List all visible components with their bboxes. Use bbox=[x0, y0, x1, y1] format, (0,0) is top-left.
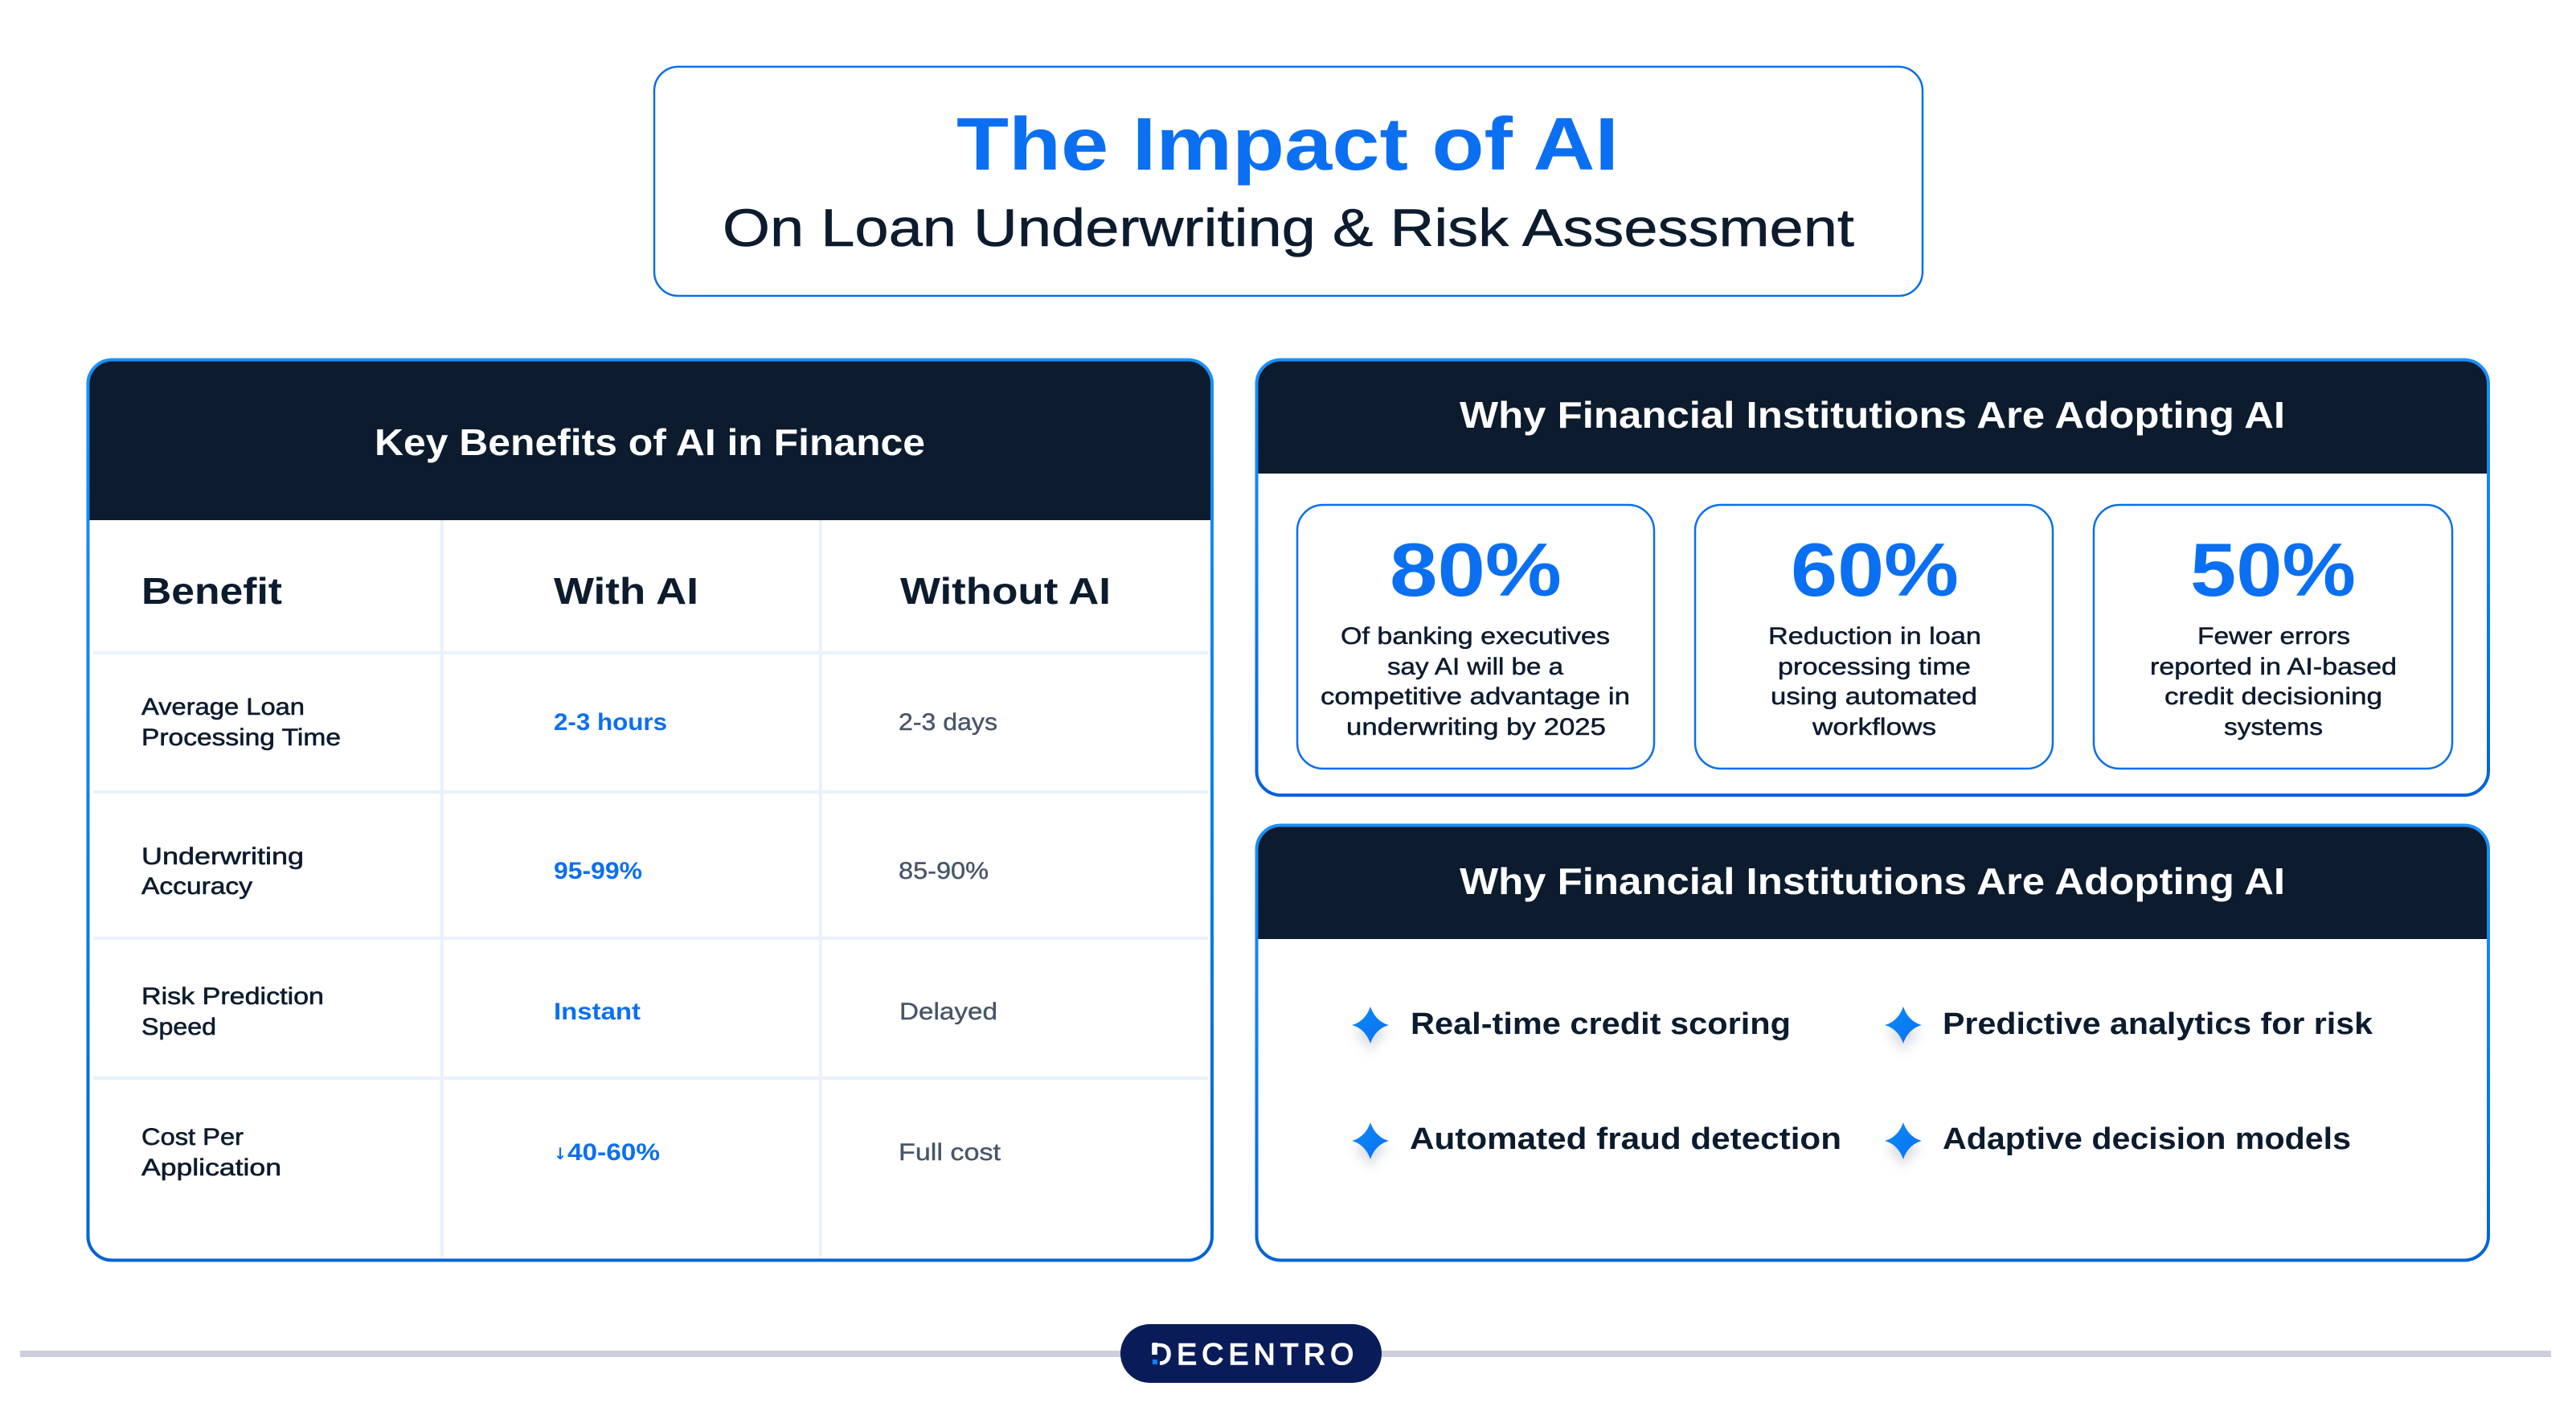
item: predictive analytics: Predictive analytics for risk bbox=[1943, 1007, 2373, 1041]
row: average loan processing time: 2-3 hours bbox=[554, 709, 667, 736]
title: The Impact of AI bbox=[956, 102, 1619, 186]
row: average loan processing time bbox=[141, 694, 997, 751]
stat card: 50%: systems bbox=[2224, 714, 2323, 740]
stat card: 60%: Reduction in loan bbox=[1768, 623, 1981, 650]
icon: star real-time bbox=[1352, 1007, 1389, 1053]
stat card: 80%: say AI will be a bbox=[1387, 654, 1563, 680]
row: risk prediction speed bbox=[141, 983, 997, 1040]
row: risk prediction speed: Risk Prediction bbox=[141, 983, 324, 1010]
logo: Decentro: DECENTRO bbox=[1150, 1338, 1354, 1371]
panel: adoption statistics bbox=[1257, 360, 2488, 795]
row: underwriting accuracy bbox=[141, 843, 989, 900]
panel: capabilities list bbox=[1257, 825, 2488, 1261]
stat card: 50% bbox=[2094, 505, 2452, 769]
stat card: 60%: 60% bbox=[1791, 527, 1959, 612]
row: underwriting accuracy: Underwriting bbox=[141, 843, 304, 870]
row: average loan processing time: 2-3 days bbox=[899, 709, 997, 736]
table header row: Without AI bbox=[900, 570, 1111, 612]
row: risk prediction speed: Delayed bbox=[899, 999, 997, 1025]
footer divider bbox=[20, 1351, 2551, 1357]
stat card: 50%: reported in AI-based bbox=[2150, 654, 2397, 680]
panel: key benefits table bbox=[88, 360, 1212, 1261]
table header row: Benefit bbox=[141, 570, 282, 612]
table header row bbox=[141, 570, 1111, 612]
title box bbox=[654, 67, 1923, 296]
stat card: 80%: underwriting by 2025 bbox=[1346, 714, 1606, 740]
row: underwriting accuracy: Accuracy bbox=[141, 873, 252, 900]
item: real-time credit scoring: Real-time credit scoring bbox=[1411, 1007, 1791, 1041]
panel header bbox=[1257, 360, 2488, 474]
stat card: 80%: 80% bbox=[1390, 527, 1562, 612]
logo: Decentro bbox=[1120, 1324, 1382, 1383]
row: risk prediction speed: Instant bbox=[554, 999, 641, 1025]
row: average loan processing time: Average Loan bbox=[141, 694, 305, 720]
row: cost per application: Cost Per bbox=[141, 1124, 244, 1150]
icon: star adaptive bbox=[1885, 1122, 1922, 1169]
row: cost per application: ↓ bbox=[554, 1144, 567, 1163]
stat card: 60%: using automated bbox=[1771, 683, 1977, 710]
stat card: 80%: competitive advantage in bbox=[1321, 683, 1630, 710]
row: cost per application: Full cost bbox=[899, 1139, 1001, 1166]
row: underwriting accuracy: 85-90% bbox=[899, 858, 989, 884]
row: cost per application: Application bbox=[141, 1155, 281, 1181]
item: adaptive decision models: Adaptive decision models bbox=[1943, 1122, 2351, 1156]
panel heading: Key Benefits of AI in Finance bbox=[375, 421, 925, 463]
panel header bbox=[88, 360, 1212, 520]
stat card: 60%: processing time bbox=[1778, 654, 1971, 680]
stat card: 80%: Of banking executives bbox=[1341, 623, 1610, 650]
icon: star fraud bbox=[1352, 1122, 1389, 1169]
row: cost per application bbox=[141, 1124, 1001, 1181]
stat card: 50%: 50% bbox=[2190, 527, 2356, 612]
panel heading: Why Financial Institutions Are Adopting AI bbox=[1460, 394, 2285, 436]
icon: star predictive bbox=[1885, 1007, 1922, 1053]
row: risk prediction speed: Speed bbox=[141, 1014, 216, 1040]
stat card: 60%: workflows bbox=[1812, 714, 1936, 740]
stat card: 80% bbox=[1297, 505, 1654, 769]
panel header bbox=[1257, 825, 2488, 939]
table header row: With AI bbox=[554, 570, 698, 612]
stat card: 50%: credit decisioning bbox=[2164, 683, 2382, 710]
panel heading: Why Financial Institutions Are Adopting AI bbox=[1460, 860, 2285, 902]
subtitle: On Loan Underwriting & Risk Assessment bbox=[723, 198, 1854, 257]
stat card: 50%: Fewer errors bbox=[2197, 623, 2350, 650]
row: cost per application: 40-60% bbox=[567, 1139, 660, 1166]
row: average loan processing time: Processing Time bbox=[141, 724, 341, 751]
item: automated fraud detection: Automated fraud detection bbox=[1410, 1122, 1841, 1156]
stat card: 60% bbox=[1695, 505, 2053, 769]
row: underwriting accuracy: 95-99% bbox=[554, 858, 642, 884]
